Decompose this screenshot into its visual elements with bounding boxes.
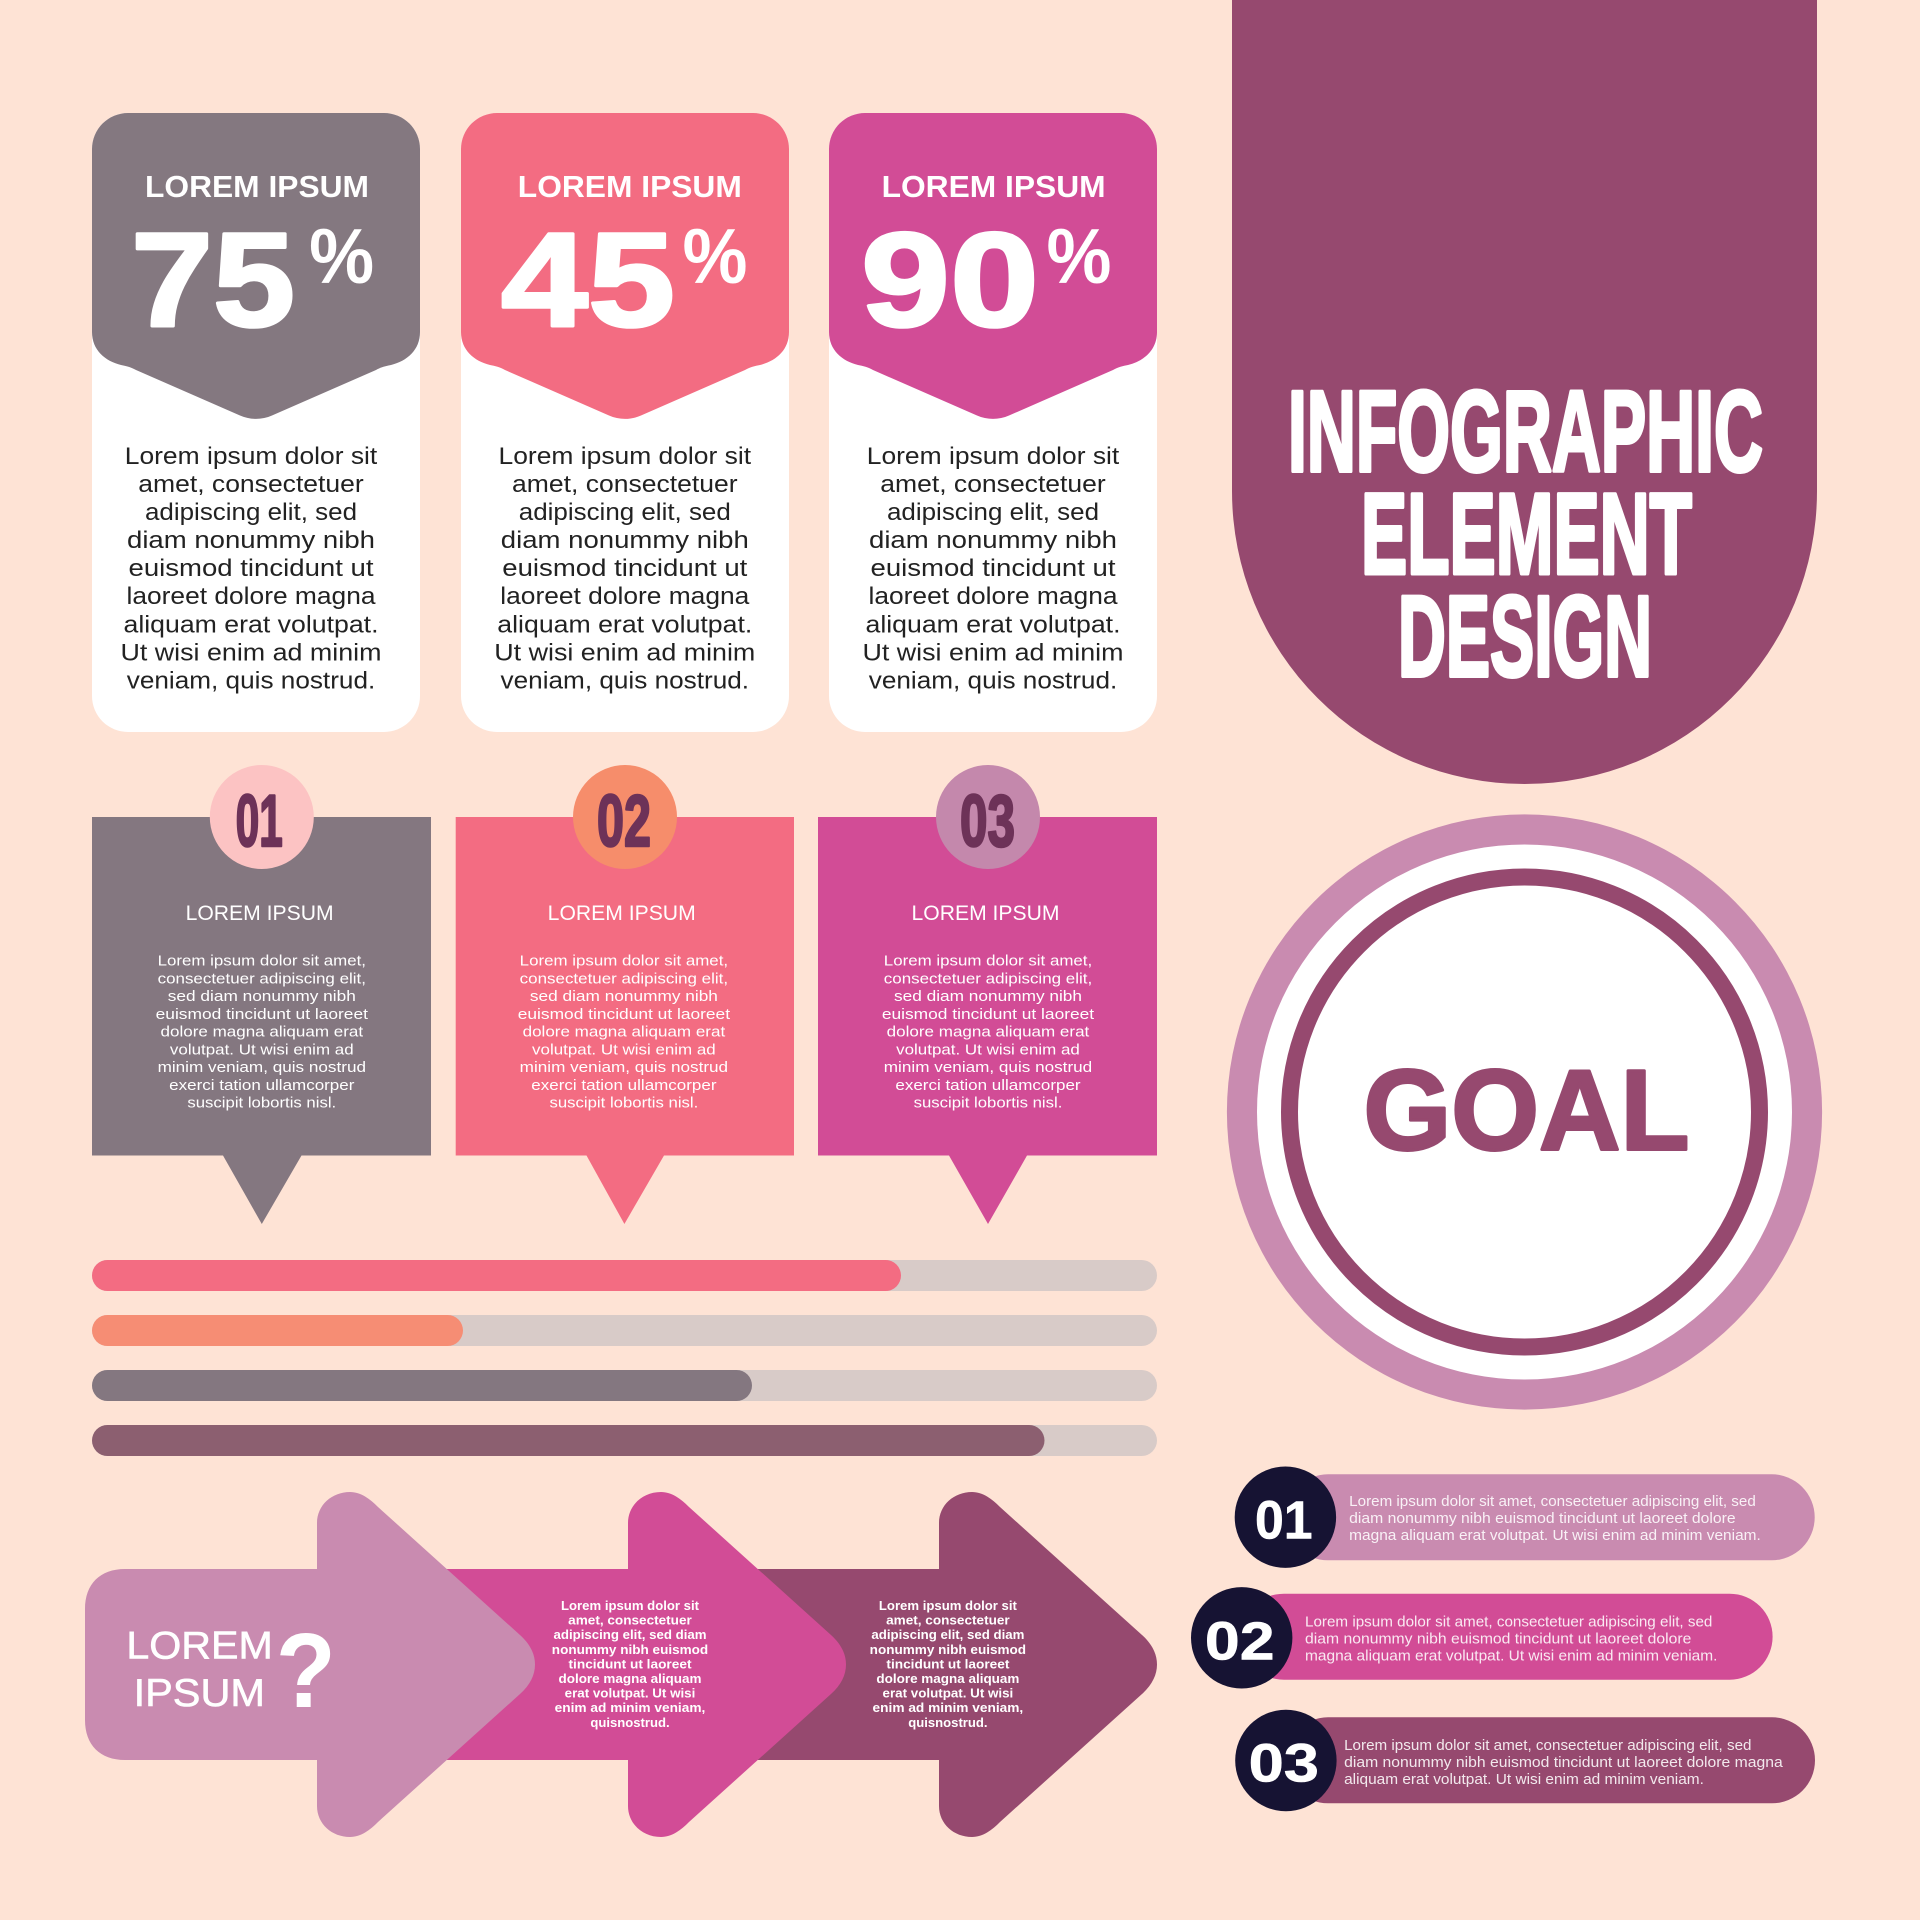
body text: minim veniam, quis nostrud: [884, 1059, 1092, 1076]
body text: amet, consectetuer: [138, 471, 364, 498]
body text: sed diam nonummy nibh: [894, 988, 1082, 1005]
arrow 1 label: IPSUM: [134, 1672, 265, 1715]
arrow 3 text: enim ad minim veniam,: [873, 1701, 1023, 1715]
bar 4: [92, 1425, 1157, 1456]
body text: veniam, quis nostrud.: [127, 667, 375, 694]
body text: Lorem ipsum dolor sit: [499, 443, 751, 470]
heading: LOREM IPSUM: [912, 902, 1060, 925]
body text: Lorem ipsum dolor sit amet,: [158, 953, 366, 970]
text: diam nonummy nibh euismod tincidunt ut laoreet dolore magna: [1344, 1755, 1784, 1771]
body text: euismod tincidunt ut laoreet: [156, 1006, 369, 1023]
arrow 2 text: nonummy nibh euismod: [552, 1643, 708, 1657]
body text: adipiscing elit, sed: [145, 499, 357, 526]
body text: dolore magna aliquam erat: [887, 1024, 1090, 1041]
number 75: 75: [131, 206, 295, 355]
arrow 2 text: erat volutpat. Ut wisi: [565, 1687, 695, 1701]
body text: adipiscing elit, sed: [887, 499, 1099, 526]
arrow 2 text: quisnostrud.: [590, 1716, 670, 1730]
bar 3: [92, 1370, 1157, 1401]
body text: veniam, quis nostrud.: [501, 667, 749, 694]
body text: [882, 953, 1095, 1112]
arrow 3 text: quisnostrud.: [908, 1716, 988, 1730]
arrow 3 text: nonummy nibh euismod: [870, 1643, 1026, 1657]
body text: euismod tincidunt ut: [870, 555, 1116, 582]
number badge 02: 02: [597, 781, 651, 862]
chart: progress bars: [92, 1260, 1157, 1456]
number badge 03: 03: [960, 781, 1015, 862]
body text: consectetuer adipiscing elit,: [884, 970, 1092, 987]
body text: Ut wisi enim ad minim: [120, 639, 382, 666]
arrow process: [85, 1492, 1157, 1837]
heading: LOREM IPSUM: [548, 902, 696, 925]
body text: Lorem ipsum dolor sit: [867, 443, 1119, 470]
title: ELEMENT: [1361, 470, 1692, 598]
body text: sed diam nonummy nibh: [530, 988, 718, 1005]
panel: list item 02: [1191, 1587, 1773, 1689]
arrow 2 text: Lorem ipsum dolor sit: [561, 1599, 700, 1613]
body text: laoreet dolore magna: [868, 583, 1118, 610]
text: aliquam erat volutpat. Ut wisi enim ad minim veniam.: [1344, 1772, 1704, 1788]
body text: suscipit lobortis nisl.: [550, 1095, 698, 1112]
heading: LOREM IPSUM: [518, 169, 742, 204]
title: [1288, 368, 1763, 701]
arrow 2 text: adipiscing elit, sed diam: [554, 1628, 706, 1642]
body text: laoreet dolore magna: [500, 583, 750, 610]
body text: aliquam erat volutpat.: [124, 611, 378, 638]
arrow 3 text: dolore magna aliquam: [876, 1672, 1019, 1686]
panel: numbered box 03: [818, 765, 1157, 1224]
body text: minim veniam, quis nostrud: [520, 1059, 728, 1076]
shield header: 90%: [829, 113, 1157, 419]
arrow 3 text: amet, consectetuer: [886, 1614, 1010, 1628]
body text: euismod tincidunt ut: [128, 555, 374, 582]
arrow 1 label: ?: [276, 1612, 336, 1730]
arrow 1 label: [126, 1612, 336, 1730]
arrow 3 text: [870, 1599, 1026, 1730]
arrow 2 text: enim ad minim veniam,: [555, 1701, 705, 1715]
panel: goal badge: [1227, 814, 1822, 1410]
body text: aliquam erat volutpat.: [866, 611, 1120, 638]
body text: exerci tation ullamcorper: [895, 1077, 1081, 1094]
heading: LOREM IPSUM: [882, 169, 1106, 204]
body text: volutpat. Ut wisi enim ad: [532, 1042, 716, 1058]
bar 1: [92, 1260, 1157, 1291]
shield header: 45%: [461, 113, 789, 419]
number 90: 90: [861, 206, 1039, 355]
arrow 2 text: amet, consectetuer: [568, 1614, 692, 1628]
percent sign: %: [1046, 212, 1112, 300]
goal label: GOAL: [1364, 1048, 1690, 1174]
body text: exerci tation ullamcorper: [169, 1077, 354, 1094]
arrow 2 text: dolore magna aliquam: [558, 1672, 702, 1686]
body text: [862, 443, 1124, 694]
arrow 3 text: adipiscing elit, sed diam: [871, 1628, 1024, 1642]
panel: stat card 75%: [92, 113, 420, 732]
arrow 3 text: erat volutpat. Ut wisi: [883, 1687, 1013, 1701]
heading: LOREM IPSUM: [186, 902, 334, 925]
body text: Ut wisi enim ad minim: [862, 639, 1124, 666]
panel: stat card 90%: [829, 113, 1157, 732]
body text: aliquam erat volutpat.: [497, 611, 752, 638]
arrow 2 text: tincidunt ut laoreet: [568, 1657, 692, 1671]
body text: [156, 953, 369, 1112]
text: [1305, 1614, 1717, 1664]
number circle 02: [1191, 1587, 1292, 1689]
bar 2: [92, 1315, 1157, 1346]
percent sign: %: [309, 212, 374, 300]
panel: list item 01: [1235, 1466, 1815, 1568]
body text: diam nonummy nibh: [501, 527, 749, 554]
body text: veniam, quis nostrud.: [869, 667, 1117, 694]
panel: title banner: [1232, 0, 1817, 784]
body text: adipiscing elit, sed: [519, 499, 731, 526]
body text: suscipit lobortis nisl.: [914, 1095, 1062, 1112]
number circle 03: 03: [1249, 1734, 1319, 1794]
body text: amet, consectetuer: [880, 471, 1106, 498]
body text: euismod tincidunt ut: [502, 555, 748, 582]
number circle 01: 01: [1255, 1490, 1313, 1550]
body text: laoreet dolore magna: [126, 583, 376, 610]
body text: diam nonummy nibh: [869, 527, 1117, 554]
text: diam nonummy nibh euismod tincidunt ut laoreet dolore: [1349, 1511, 1736, 1527]
arrow 2: [396, 1492, 846, 1837]
number 45: 45: [501, 206, 675, 355]
body text: Lorem ipsum dolor sit: [125, 443, 377, 470]
text: diam nonummy nibh euismod tincidunt ut laoreet dolore: [1305, 1631, 1691, 1647]
text: magna aliquam erat volutpat. Ut wisi enim ad minim veniam.: [1349, 1528, 1761, 1544]
text: Lorem ipsum dolor sit amet, consectetuer adipiscing elit, sed: [1344, 1738, 1752, 1754]
text: Lorem ipsum dolor sit amet, consectetuer adipiscing elit, sed: [1305, 1614, 1712, 1630]
panel: numbered box 02: [456, 765, 794, 1224]
text: [1349, 1494, 1761, 1544]
body text: diam nonummy nibh: [127, 527, 375, 554]
body text: [120, 443, 382, 694]
panel: numbered box 01: [92, 765, 431, 1224]
body text: euismod tincidunt ut laoreet: [882, 1006, 1095, 1023]
body text: Ut wisi enim ad minim: [494, 639, 755, 666]
body text: [518, 953, 731, 1112]
body text: minim veniam, quis nostrud: [158, 1059, 366, 1076]
number badge 01: [210, 765, 314, 869]
body text: consectetuer adipiscing elit,: [158, 970, 366, 987]
arrow 3 text: Lorem ipsum dolor sit: [879, 1599, 1018, 1613]
number circle 03: [1235, 1710, 1337, 1811]
body text: exerci tation ullamcorper: [531, 1077, 717, 1094]
body text: Lorem ipsum dolor sit amet,: [884, 953, 1092, 970]
heading: LOREM IPSUM: [145, 169, 369, 204]
body text: Lorem ipsum dolor sit amet,: [520, 953, 728, 970]
title: DESIGN: [1398, 573, 1652, 701]
arrow 2 text: [552, 1599, 708, 1730]
percent sign: %: [682, 212, 748, 300]
body text: [494, 443, 755, 694]
number circle 02: 02: [1205, 1611, 1275, 1671]
body text: amet, consectetuer: [512, 471, 738, 498]
number badge 02: [573, 765, 677, 869]
body text: sed diam nonummy nibh: [168, 988, 356, 1005]
text: Lorem ipsum dolor sit amet, consectetuer adipiscing elit, sed: [1349, 1494, 1756, 1510]
body text: dolore magna aliquam erat: [523, 1024, 726, 1041]
body text: consectetuer adipiscing elit,: [520, 970, 728, 987]
body text: dolore magna aliquam erat: [160, 1024, 364, 1041]
shield header: 75%: [92, 113, 420, 419]
arrow 1 label: LOREM: [126, 1625, 273, 1668]
body text: volutpat. Ut wisi enim ad: [896, 1042, 1080, 1058]
arrow 3: [707, 1492, 1157, 1837]
body text: euismod tincidunt ut laoreet: [518, 1006, 731, 1023]
panel: list item 03: [1235, 1710, 1815, 1811]
number badge 03: [936, 765, 1040, 869]
number badge 01: 01: [236, 781, 283, 862]
panel: stat card 45%: [461, 113, 789, 732]
text: magna aliquam erat volutpat. Ut wisi enim ad minim veniam.: [1305, 1648, 1717, 1664]
body text: volutpat. Ut wisi enim ad: [170, 1042, 354, 1058]
arrow 3 text: tincidunt ut laoreet: [886, 1657, 1010, 1671]
arrow 1: [85, 1492, 535, 1837]
number circle 01: [1235, 1466, 1336, 1568]
body text: suscipit lobortis nisl.: [187, 1095, 336, 1112]
text: [1344, 1738, 1784, 1788]
